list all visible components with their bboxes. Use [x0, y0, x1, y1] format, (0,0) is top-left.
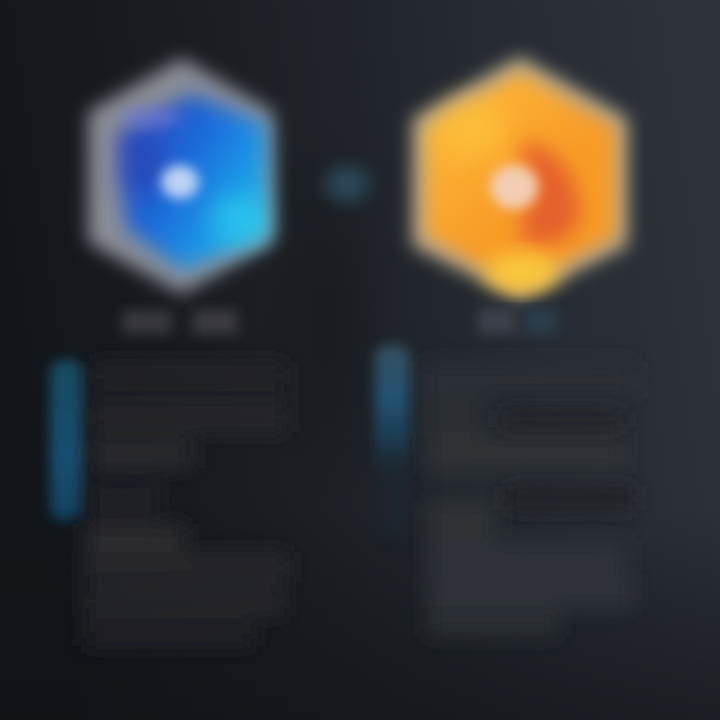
icon: orange hexagon logo	[412, 56, 628, 300]
panel: left feature list	[50, 360, 289, 646]
panel: right feature list	[375, 345, 635, 636]
heading: right product name	[478, 308, 558, 334]
right accent bar	[375, 345, 410, 480]
right text block	[424, 362, 634, 636]
heading: left product name	[122, 310, 238, 334]
left text block	[84, 362, 289, 646]
left accent bar	[50, 360, 83, 520]
icon: comparison mark between logos	[325, 166, 369, 202]
dark gaps between right text lines	[500, 410, 635, 510]
icon: blue hexagon logo	[88, 58, 274, 294]
